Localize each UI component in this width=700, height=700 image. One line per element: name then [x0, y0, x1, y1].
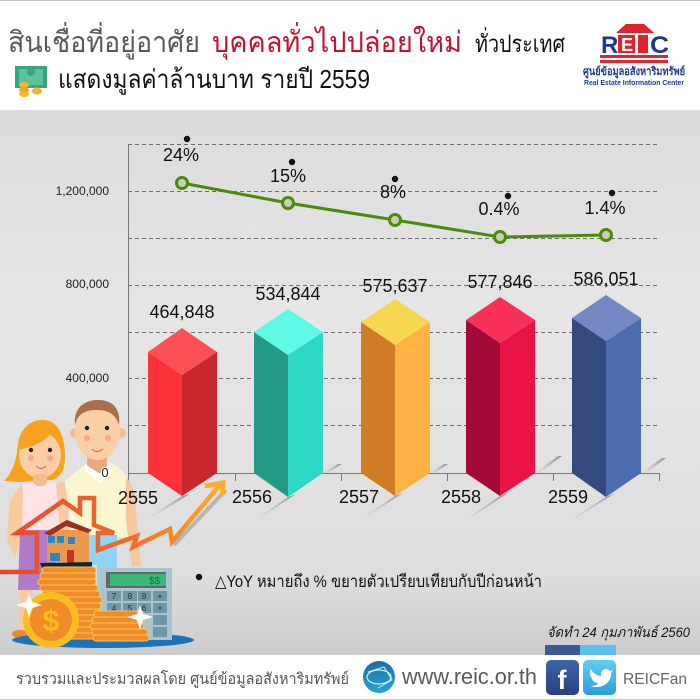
illustration: calculator: 9	[142, 592, 147, 601]
x axis year labels: 2556	[232, 487, 272, 507]
x axis year labels: 2558	[441, 487, 481, 507]
bar: 2557	[361, 299, 430, 496]
illustration: sparkles	[16, 594, 153, 630]
chart grid lines and axes	[128, 144, 660, 482]
footer credit: รวบรวมและประมวลผลโดย ศูนย์ข้อมูลอสังหาริมทรัพย์	[16, 670, 349, 689]
logo: REIC: E	[621, 35, 633, 55]
YoY note: △YoY หมายถึง % ขยายตัวเปรียบเทียบกับปีก่อนหน้า	[215, 572, 542, 591]
zero axis label: 0	[101, 465, 109, 480]
y axis labels: 800,000	[66, 277, 109, 291]
growth percent labels: 1.4%	[584, 198, 626, 218]
illustration: house outline and rising arrow	[0, 483, 226, 572]
logo: REIC	[583, 24, 685, 87]
illustration: calculator: 6	[142, 604, 147, 613]
illustration: man	[65, 400, 141, 615]
illustration: blue ground	[12, 632, 194, 648]
bar: 2556	[254, 309, 323, 497]
x axis year labels: 2557	[339, 487, 379, 507]
illustration: calculator	[100, 568, 172, 640]
y axis labels: 1,200,000	[56, 184, 109, 198]
y axis labels	[56, 184, 109, 385]
x axis year labels: 2559	[548, 487, 588, 507]
growth percent labels: 24%	[163, 145, 199, 165]
bar value labels: 586,051	[573, 269, 639, 289]
illustration: woman	[4, 420, 68, 638]
bar value labels: 575,637	[362, 276, 428, 296]
bar value labels: 464,848	[149, 302, 215, 322]
x axis year labels: 2555	[118, 488, 158, 508]
x axis year labels	[118, 487, 588, 508]
website: www.reic.or.th	[401, 664, 537, 689]
illustration: calculator: $$	[149, 576, 161, 587]
title line 1: ทั่วประเทศ	[475, 27, 565, 58]
REICFan label: REICFan	[623, 671, 687, 688]
bar value labels: 534,844	[255, 284, 321, 304]
bar value labels: 577,846	[467, 272, 533, 292]
growth percent labels: 0.4%	[478, 199, 520, 219]
title line 1	[8, 22, 565, 60]
illustration: big dollar coin	[23, 592, 79, 648]
logo: REIC: C	[650, 32, 669, 59]
logo: REIC: Real Estate Information Center	[584, 78, 684, 87]
icon: facebook: f	[558, 665, 568, 695]
y axis labels: 400,000	[66, 371, 109, 385]
bar: 2559	[572, 295, 641, 497]
footer	[0, 655, 700, 700]
illustration: coin stacks	[38, 567, 149, 641]
bar value labels	[149, 269, 639, 322]
growth percent labels: 8%	[380, 182, 406, 202]
title line 1: บุคคลทั่วไปปล่อยใหม่	[212, 22, 462, 60]
illustration: calculator: 4	[112, 604, 117, 613]
illustration: small house	[40, 520, 92, 568]
title line 2: แสดงมูลค่าล้านบาท รายปี 2559	[58, 64, 370, 95]
date note: จัดทำ 24 กุมภาพันธ์ 2560	[547, 624, 690, 641]
illustration: calculator: +	[158, 592, 163, 601]
illustration: big dollar coin: $	[43, 605, 60, 638]
icon: money and coins	[15, 66, 47, 97]
illustration: calculator: 7	[112, 592, 117, 601]
illustration: calculator: 5	[128, 604, 133, 613]
bar: 2555	[148, 328, 217, 496]
bar shadows	[145, 456, 666, 521]
bar: 2558	[466, 297, 535, 496]
icon: facebook	[546, 660, 579, 695]
illustration: calculator: ×	[158, 604, 163, 613]
icon: twitter	[583, 660, 616, 695]
growth percent labels	[163, 145, 626, 219]
logo: REIC: R	[601, 32, 618, 59]
social colour strip	[545, 645, 616, 655]
icon: globe	[363, 661, 395, 693]
chart background panel	[0, 110, 700, 655]
title line 1: สินเชื่อที่อยู่อาศัย	[8, 22, 200, 60]
growth percent labels: 15%	[270, 166, 306, 186]
asterisk markers	[184, 136, 615, 199]
illustration: calculator: 8	[128, 592, 133, 601]
growth line chart	[176, 178, 612, 242]
